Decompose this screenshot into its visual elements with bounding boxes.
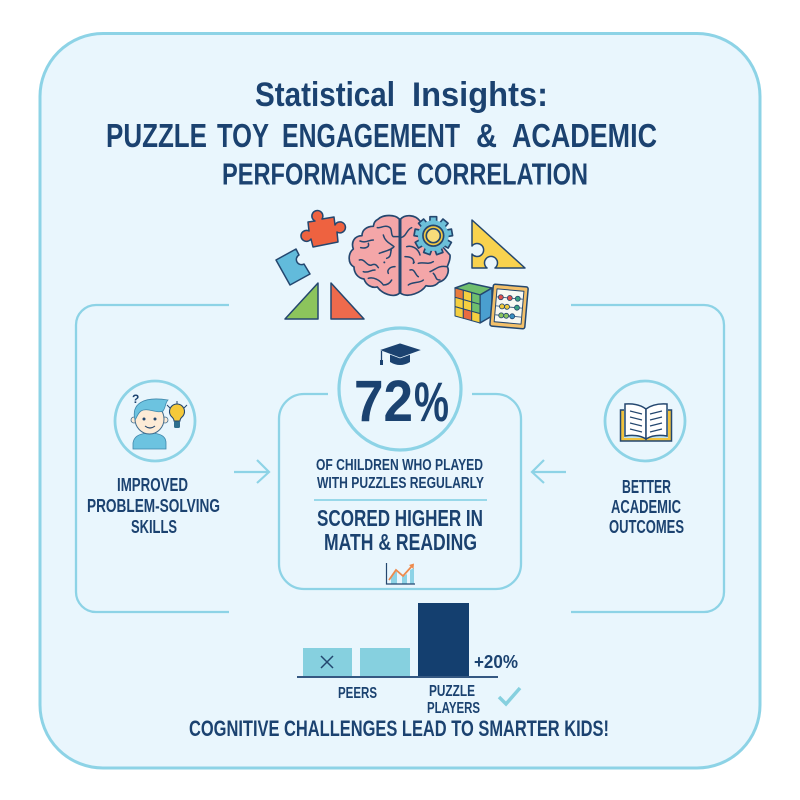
stat description: OF CHILDREN WHO PLAYED <box>316 457 483 474</box>
title: PERFORMANCE <box>222 156 407 192</box>
title: ENGAGEMENT <box>282 117 460 154</box>
label: puzzle players <box>427 683 480 717</box>
icon: puzzle and brain cluster <box>276 211 528 329</box>
icon: graduation cap <box>379 343 422 365</box>
title: ACADEMIC <box>512 117 657 154</box>
icon: growth chart <box>386 563 415 584</box>
center circle <box>339 328 461 450</box>
label: puzzle players: PUZZLE <box>429 683 475 700</box>
footer message: COGNITIVE CHALLENGES LEAD TO SMARTER KIDS! <box>189 716 609 741</box>
label <box>609 477 684 537</box>
icon: child with light bulb <box>115 381 195 461</box>
title: Insights: <box>412 76 548 114</box>
icon: yellow puzzle triangle <box>472 220 525 268</box>
title <box>106 76 657 192</box>
title: & <box>476 117 497 154</box>
icon: gear <box>414 217 453 255</box>
label: PROBLEM-SOLVING <box>87 496 220 516</box>
label: BETTER <box>622 477 671 497</box>
stat description: SCORED HIGHER IN <box>317 505 483 531</box>
arrow: left to center <box>234 460 269 483</box>
icon: rubik's cube <box>455 283 492 323</box>
bar chart <box>297 603 520 717</box>
stat: 72%: % <box>414 370 449 433</box>
icon: blue puzzle piece <box>276 249 310 285</box>
title: PUZZLE <box>106 117 207 154</box>
arrow: right to center <box>532 460 566 483</box>
stat description <box>314 457 487 555</box>
title: TOY <box>217 117 269 154</box>
icon: abacus <box>490 284 528 329</box>
label: SKILLS <box>131 517 177 537</box>
right feature: academic outcomes <box>605 381 685 537</box>
title: Statistical <box>255 76 395 114</box>
label <box>87 475 220 537</box>
icon: brain <box>349 215 450 295</box>
title: CORRELATION <box>417 156 588 192</box>
outer left bracket <box>76 305 229 612</box>
bar: peers one <box>303 648 352 676</box>
center stat box <box>279 394 521 589</box>
label: puzzle players: PLAYERS <box>427 700 480 717</box>
stat: 72%: 72 <box>354 369 413 434</box>
icon: open book <box>605 381 685 461</box>
stat: 72% <box>354 369 449 434</box>
label: ACADEMIC <box>611 497 681 517</box>
icon: red puzzle piece <box>301 211 345 247</box>
icon: cross <box>321 656 333 668</box>
bar: puzzle players <box>418 603 469 676</box>
stat description: MATH & READING <box>324 529 477 555</box>
label: peers: PEERS <box>338 685 377 702</box>
label: IMPROVED <box>117 475 188 495</box>
icon: child with light bulb: ? <box>132 392 139 406</box>
left feature: problem solving <box>87 381 220 537</box>
stat description: WITH PUZZLES REGULARLY <box>317 475 484 492</box>
outer right bracket <box>571 305 724 612</box>
icon: green triangle <box>285 283 318 319</box>
icon: check mark <box>499 688 520 704</box>
icon: red triangle <box>331 283 364 319</box>
label: OUTCOMES <box>609 517 684 537</box>
bar: peers two <box>360 648 410 676</box>
value: +20%: +20% <box>474 652 518 672</box>
